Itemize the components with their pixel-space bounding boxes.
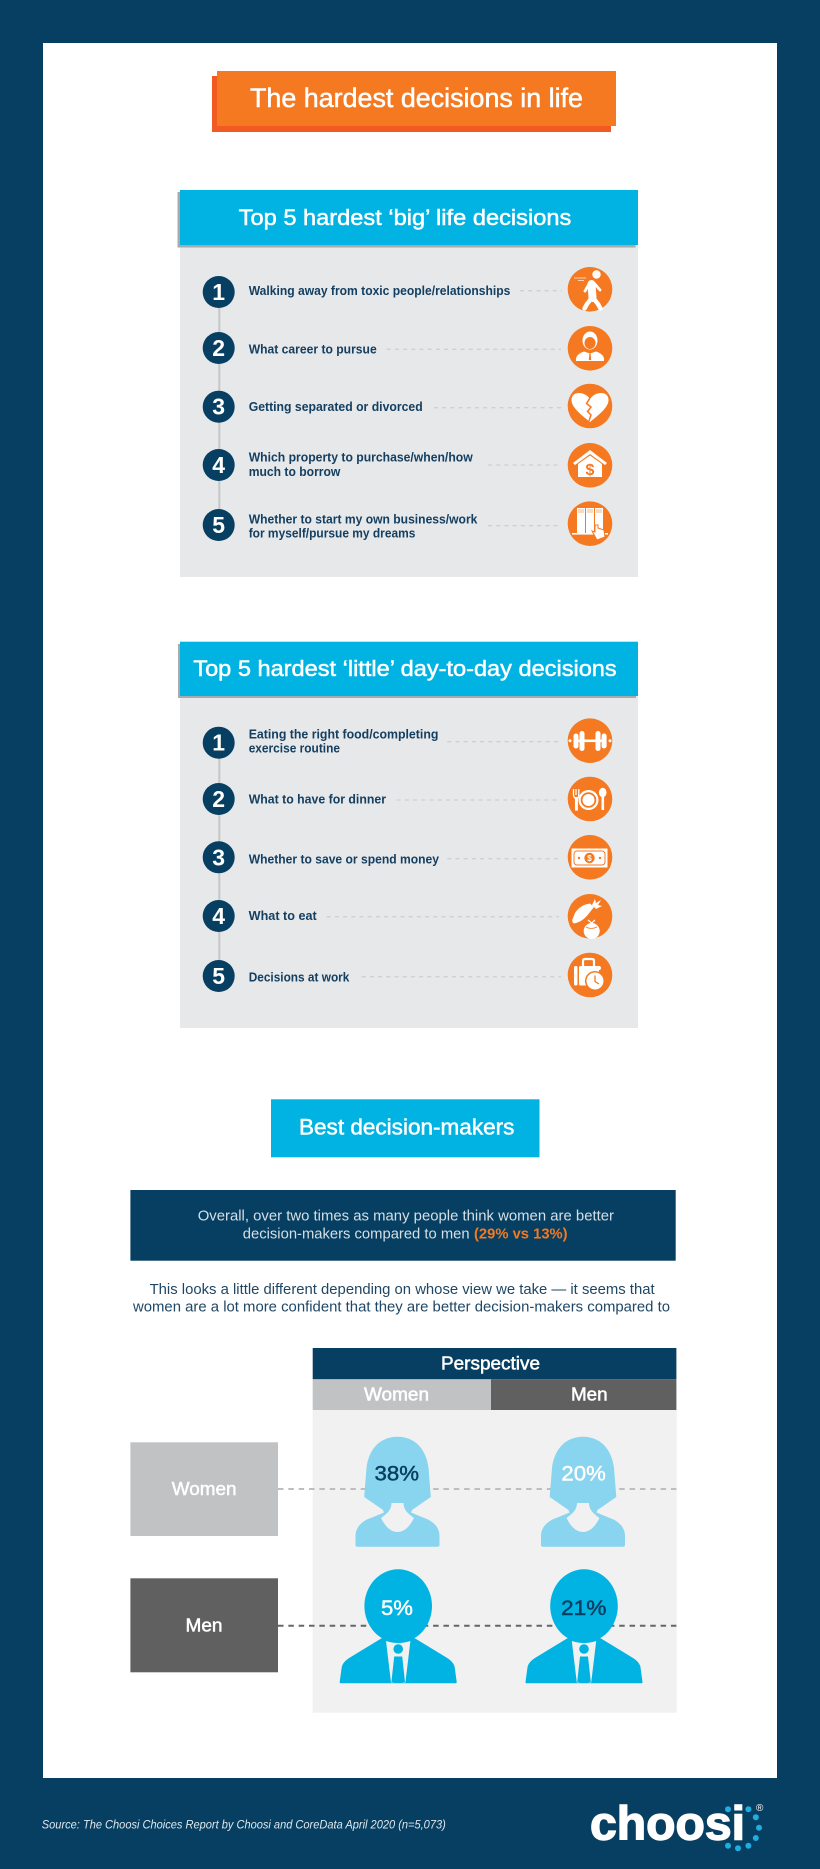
row 1: walking away: 1 [212, 279, 225, 305]
row 1: food and exercise [203, 718, 612, 763]
row 2: dinner: 2 [212, 786, 225, 812]
row 2: career: 2 [212, 335, 225, 361]
heading: little decisions: Top 5 hardest ‘little’ day-to-day decisions [193, 656, 617, 681]
row 2: career: What career to pursue [249, 342, 377, 356]
header: perspective: Perspective [441, 1353, 540, 1373]
row 1: walking away: Walking away from toxic people/relationships [249, 284, 510, 298]
row 2: dinner: What to have for dinner [249, 793, 386, 807]
woman figure: women on women 38%: 38% [374, 1463, 419, 1486]
heading: best decision-makers [271, 1099, 540, 1157]
title banner [212, 71, 616, 132]
column header: men [491, 1379, 676, 1410]
row 5: own business: for myself/pursue my dreams [249, 527, 415, 541]
woman figure: men on women 20%: 20% [561, 1463, 606, 1486]
man figure: men on men 21%: 21% [561, 1597, 606, 1620]
source note: Source: The Choosi Choices Report by Choosi and CoreData April 2020 (n=5,073) [42, 1819, 446, 1831]
row 1: food and exercise: exercise routine [249, 742, 340, 756]
heading: best decision-makers: Best decision-makers [299, 1114, 514, 1139]
row label: women: Women [172, 1479, 236, 1499]
panel: big life decisions [178, 190, 638, 577]
row 4: what to eat: 4 [212, 903, 225, 929]
callout: overall result: Overall, over two times as many people think women are better [198, 1208, 614, 1225]
column header: men: Men [571, 1385, 608, 1405]
title text: The hardest decisions in life [250, 83, 583, 113]
row 4: property [203, 443, 612, 488]
row 5: own business: Whether to start my own business/work [249, 512, 477, 526]
row 1: walking away [203, 267, 612, 312]
man figure: women on men 5%: 5% [381, 1597, 413, 1620]
row 4: property: Which property to purchase/when/how [249, 451, 473, 465]
row 2: career [203, 326, 612, 371]
row 3: divorce: Getting separated or divorced [249, 400, 423, 414]
row 3: save or spend [203, 835, 612, 880]
row 5: work: 5 [212, 963, 225, 989]
woman figure: women on women 38% [356, 1437, 440, 1547]
row label: men [130, 1578, 278, 1672]
man figure: men on men 21% [526, 1569, 642, 1683]
column header: women: Women [364, 1385, 429, 1405]
row 1: food and exercise: 1 [212, 730, 225, 756]
callout: overall result [130, 1190, 676, 1261]
row 5: work [203, 953, 612, 997]
row 1: food and exercise: Eating the right food/completing [249, 727, 438, 741]
row 3: save or spend: Whether to save or spend money [249, 853, 439, 867]
row 3: divorce [203, 384, 612, 428]
explanatory text [132, 1281, 670, 1316]
explanatory text: This looks a little different depending on whose view we take — it seems that [150, 1281, 655, 1298]
woman figure: men on women 20% [541, 1437, 625, 1547]
callout: overall result: decision-makers compared to men [243, 1225, 470, 1242]
panel: little decisions [178, 642, 638, 1028]
heading: big decisions: Top 5 hardest ‘big’ life decisions [239, 205, 571, 230]
row 5: own business [203, 501, 612, 546]
row 3: save or spend: $ [587, 854, 592, 863]
row 5: own business: 5 [212, 512, 225, 538]
row 4: property: much to borrow [249, 465, 341, 479]
row 3: save or spend: 3 [212, 844, 225, 870]
column header: women [313, 1379, 491, 1410]
logo: choosi: ® [756, 1803, 764, 1814]
perspective matrix [130, 1348, 677, 1713]
row 3: divorce: 3 [212, 394, 225, 420]
row 5: work: Decisions at work [249, 970, 349, 984]
row label: men: Men [186, 1616, 222, 1636]
row 4: property: $ [586, 462, 595, 479]
man figure: women on men 5% [340, 1569, 457, 1683]
highlighted figures: (29% vs 13%) [474, 1225, 568, 1242]
logo: choosi: choosi [590, 1796, 745, 1849]
row label: women [130, 1442, 278, 1536]
row 4: what to eat [203, 894, 612, 939]
explanatory text: women are a lot more confident that they are better decision-makers compared to [132, 1299, 670, 1316]
header: perspective [313, 1348, 676, 1379]
row 4: property: 4 [212, 452, 225, 478]
row 4: what to eat: What to eat [249, 909, 318, 923]
row 2: dinner [203, 777, 612, 821]
